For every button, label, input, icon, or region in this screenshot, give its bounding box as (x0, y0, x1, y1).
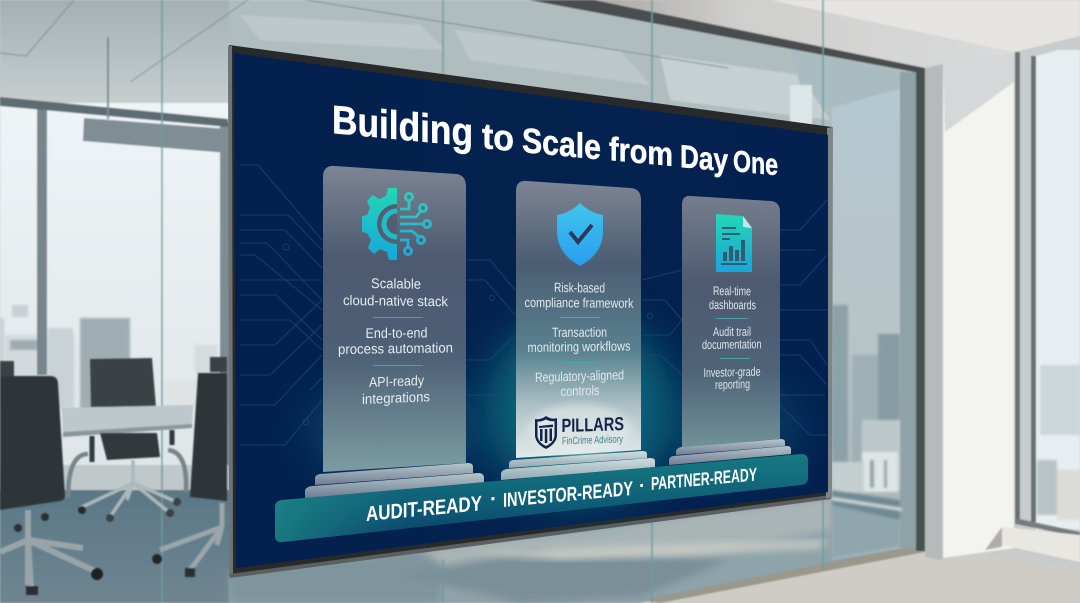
logo glow (528, 404, 632, 456)
logo shield (535, 416, 557, 449)
city through left window (0, 305, 217, 410)
icon: report document (716, 214, 752, 272)
card glass 2 (516, 181, 641, 458)
text: real-time dashboards: Real-time (713, 284, 751, 298)
banner text: · (639, 475, 645, 497)
icon: shield (557, 203, 603, 266)
plinth 2 (501, 451, 655, 480)
logo wordmark: PILLARS (562, 414, 624, 437)
title: Scale (522, 121, 601, 167)
logo: Pillars FinCrime Advisory (528, 404, 632, 456)
icon: gear and circuit (362, 188, 431, 260)
chair behind table (90, 358, 156, 407)
text: real-time dashboards: Audit trail (713, 325, 751, 339)
left window mullions and header (37, 105, 47, 375)
text: scalable cloud-native stack: End-to-end (366, 325, 427, 341)
floor under TV (229, 480, 925, 603)
text: scalable cloud-native stack: integrations (362, 388, 430, 407)
text: scalable cloud-native stack: cloud-native stack (343, 292, 449, 309)
hanging light (83, 118, 228, 153)
text: risk-based compliance: monitoring workflows (528, 339, 631, 355)
floor right (640, 548, 1080, 603)
ceiling through glass (0, 0, 925, 135)
text: risk-based compliance: controls (560, 383, 600, 399)
city through right glass (832, 305, 902, 558)
large foreground chair (0, 376, 65, 510)
text: scalable cloud-native stack (338, 275, 453, 407)
panel: reporting (669, 196, 791, 465)
text: risk-based compliance (524, 280, 634, 399)
text: real-time dashboards: Investor-grade (704, 365, 761, 380)
banner bar (275, 454, 808, 542)
window sill (1002, 527, 1080, 562)
banner text: AUDIT-READY (366, 492, 482, 526)
small far chair (0, 361, 14, 376)
text: risk-based compliance: compliance framework (524, 295, 634, 311)
panel: compliance (501, 181, 655, 480)
text: risk-based compliance: Transaction (552, 325, 607, 340)
conference table (62, 405, 193, 436)
title: Day (680, 138, 728, 179)
floor left (0, 465, 232, 495)
banner text (366, 463, 757, 526)
card glass 3 (682, 196, 780, 447)
banner text: · (490, 487, 497, 511)
text: risk-based compliance: Risk-based (554, 280, 605, 296)
circuit pattern (240, 165, 827, 445)
text: real-time dashboards: documentation (702, 337, 762, 352)
title: from (609, 131, 673, 174)
glass panel joints (162, 0, 823, 603)
right window (1036, 50, 1080, 530)
text: risk-based compliance: Regulatory-aligned (535, 367, 624, 385)
screen (234, 53, 828, 568)
readiness banner (275, 454, 808, 542)
card glass 1 (323, 166, 466, 472)
title (332, 98, 778, 182)
plinth 1 (305, 463, 484, 498)
banner text: INVESTOR-READY (503, 478, 633, 512)
plinth 3 (669, 439, 791, 465)
text: real-time dashboards (702, 284, 762, 392)
text: real-time dashboards: reporting (715, 377, 750, 392)
banner text: PARTNER-READY (651, 463, 757, 494)
right chair (190, 373, 227, 501)
right glass frame (529, 0, 925, 74)
left window sky (0, 103, 230, 473)
text: scalable cloud-native stack: process automation (338, 339, 453, 357)
logo tagline: FinCrime Advisory (562, 433, 624, 447)
concrete column (925, 64, 943, 560)
display frame (229, 45, 832, 577)
text: scalable cloud-native stack: API-ready (369, 372, 424, 390)
text: real-time dashboards: dashboards (709, 298, 756, 312)
title: to (482, 115, 514, 159)
panel: scalable technology (305, 166, 484, 498)
text: scalable cloud-native stack: Scalable (371, 275, 421, 292)
title: One (733, 145, 778, 182)
ceiling seams (0, 0, 728, 82)
interior ceiling, right (594, 0, 1080, 70)
meeting room furniture (0, 357, 227, 595)
title: Building (332, 98, 473, 155)
center glow (485, 320, 675, 500)
right glass (832, 74, 917, 560)
wall-mounted display (228, 45, 833, 578)
